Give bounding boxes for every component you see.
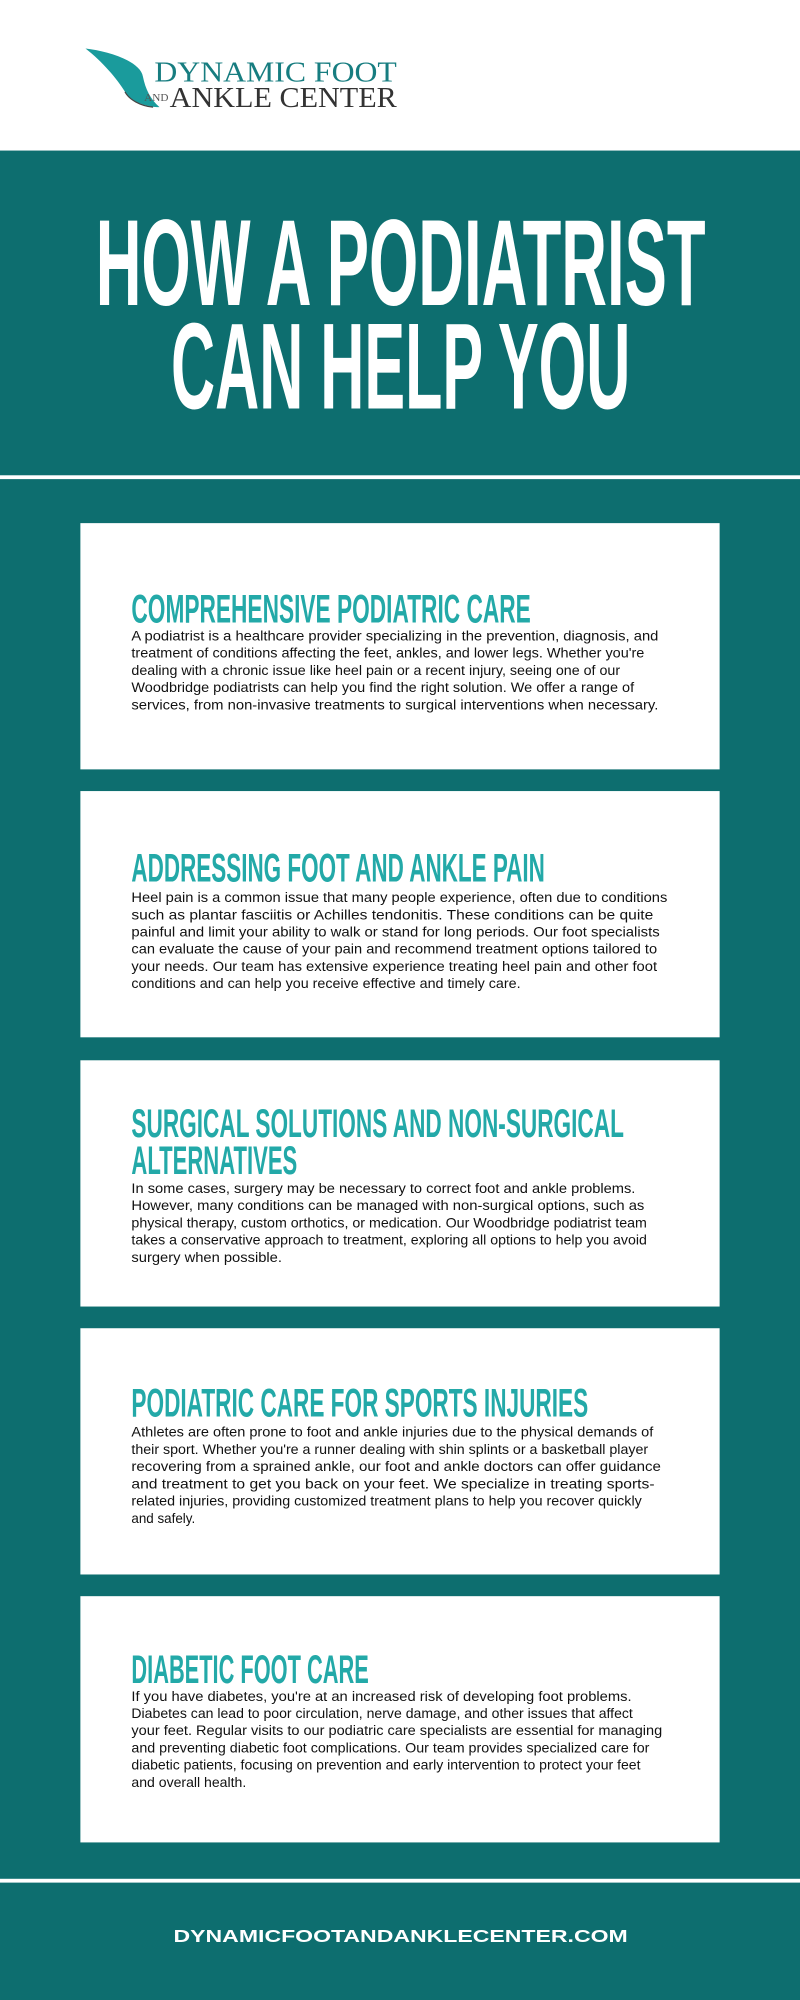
panel: sports injuries: and treatment to get you back on your feet. We specialize in treating sports- xyxy=(131,1475,655,1491)
panel: diabetic foot care xyxy=(80,1596,720,1842)
panel: diabetic foot care: diabetic patients, focusing on prevention and early intervention to protect your feet xyxy=(131,1757,641,1773)
title xyxy=(96,194,706,434)
panel: surgical solutions: takes a conservative approach to treatment, exploring all options to help you avoid xyxy=(131,1232,647,1248)
panel: sports injuries: and safely. xyxy=(131,1510,195,1526)
panel: addressing foot and ankle pain: such as plantar fasciitis or Achilles tendonitis. These conditions can be quite xyxy=(131,906,653,922)
panel: addressing foot and ankle pain: can evaluate the cause of your pain and recommend treatment options tailored to xyxy=(131,941,657,957)
panel: comprehensive podiatric care xyxy=(80,523,720,769)
panel: surgical solutions: surgery when possible. xyxy=(131,1249,282,1265)
panel: comprehensive podiatric care: A podiatrist is a healthcare provider specializing in the prevention, diagnosis, and xyxy=(131,628,658,644)
panel: surgical solutions: In some cases, surgery may be necessary to correct foot and ankle problems. xyxy=(131,1180,635,1196)
icon: foot swoosh xyxy=(85,48,159,107)
panel: sports injuries: recovering from a sprained ankle, our foot and ankle doctors can offer guidance xyxy=(131,1458,661,1474)
logo xyxy=(85,48,397,114)
logo: DYNAMIC FOOT xyxy=(154,58,397,89)
panel: surgical solutions xyxy=(80,1060,720,1307)
panel: diabetic foot care: your feet. Regular visits to our podiatric care specialists are essential for managing xyxy=(131,1722,662,1738)
panel: addressing foot and ankle pain: painful and limit your ability to walk or stand for long periods. Our foot specialists xyxy=(131,924,660,940)
panel: diabetic foot care: If you have diabetes, you're at an increased risk of developing foot problems. xyxy=(131,1688,632,1704)
panel: comprehensive podiatric care: dealing with a chronic issue like heel pain or a recent injury, seeing one of our xyxy=(131,662,620,678)
panel: sports injuries: related injuries, providing customized treatment plans to help you recover quickly xyxy=(131,1493,642,1509)
panel: diabetic foot care: and overall health. xyxy=(131,1774,246,1790)
panel: addressing foot and ankle pain: conditions and can help you receive effective and timely care. xyxy=(131,975,521,991)
panel: comprehensive podiatric care: Woodbridge podiatrists can help you find the right solution. We offer a range of xyxy=(131,679,634,695)
panel: comprehensive podiatric care: services, from non-invasive treatments to surgical interventions when necessary. xyxy=(131,696,658,712)
panel: diabetic foot care: and preventing diabetic foot complications. Our team provides specialized care for xyxy=(131,1739,650,1755)
panel: surgical solutions: However, many conditions can be managed with non-surgical options, such as xyxy=(131,1197,644,1213)
panel: diabetic foot care: DIABETIC FOOT CARE xyxy=(131,1648,369,1692)
logo: AND xyxy=(144,93,168,104)
panel: comprehensive podiatric care: treatment of conditions affecting the feet, ankles, and lower legs. Whether you're xyxy=(131,645,645,661)
panel: surgical solutions: physical therapy, custom orthotics, or medication. Our Woodbridge podiatrist team xyxy=(131,1214,647,1230)
panel: sports injuries: their sport. Whether you're a runner dealing with shin splints or a basketball player xyxy=(131,1441,649,1457)
panel: diabetic foot care: Diabetes can lead to poor circulation, nerve damage, and other issues that affect xyxy=(131,1705,633,1721)
panel: addressing foot and ankle pain: Heel pain is a common issue that many people experience, often due to conditions xyxy=(131,889,667,905)
logo: ANKLE CENTER xyxy=(170,83,397,114)
panel: addressing foot and ankle pain: your needs. Our team has extensive experience treating heel pain and other foot xyxy=(131,958,657,974)
panel: addressing foot and ankle pain xyxy=(80,791,720,1037)
footer url: DYNAMICFOOTANDANKLECENTER.COM xyxy=(174,1926,628,1946)
panel: sports injuries: Athletes are often prone to foot and ankle injuries due to the physical demands of xyxy=(131,1424,653,1440)
panel: sports injuries xyxy=(80,1328,720,1574)
header background xyxy=(0,0,800,151)
panel: surgical solutions: ALTERNATIVES xyxy=(131,1139,297,1183)
